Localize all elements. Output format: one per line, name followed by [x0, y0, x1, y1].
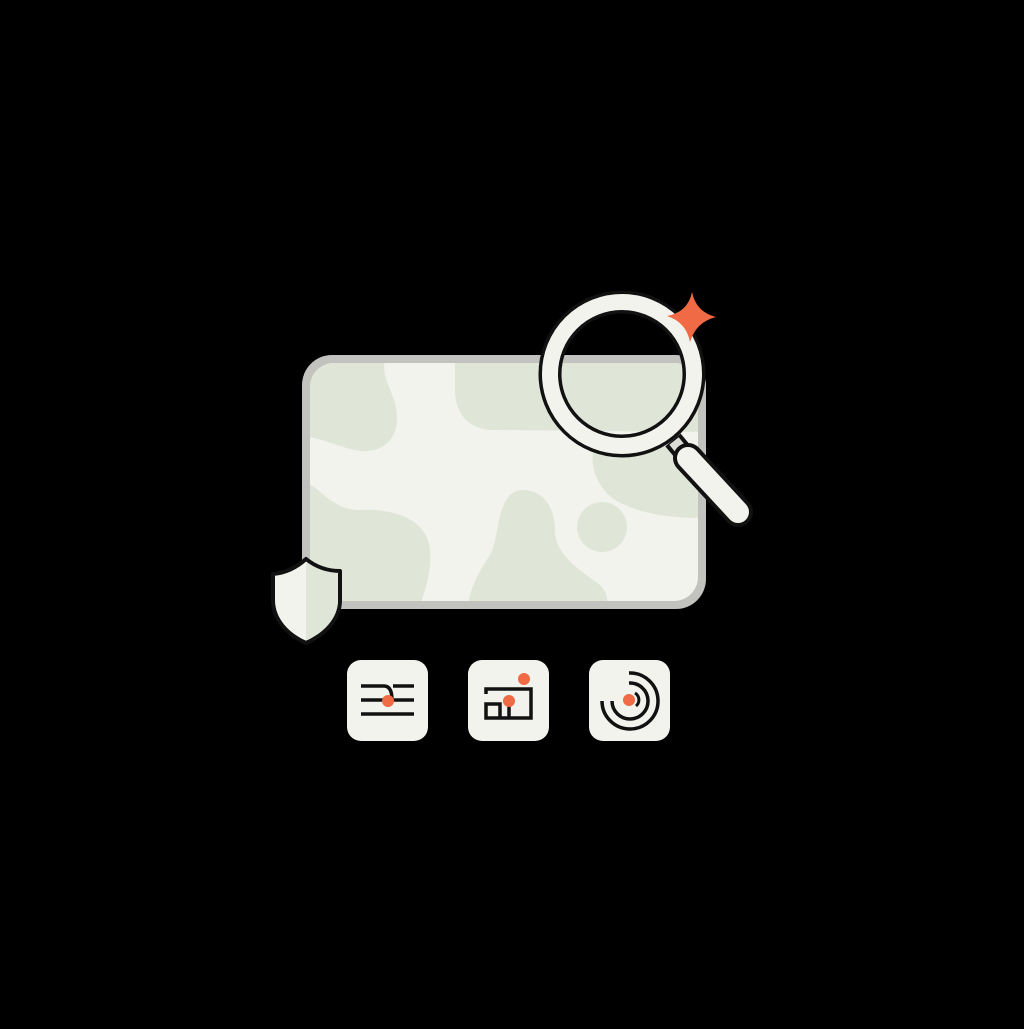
- panel: map card: [300, 355, 710, 610]
- icon: radar target: [589, 660, 670, 741]
- icon: magnifying glass: [550, 302, 738, 512]
- icon: filter list: [347, 660, 428, 741]
- icon: sparkle star: [667, 292, 716, 342]
- icon: bar chart: [468, 660, 549, 741]
- icon: shield: [273, 559, 340, 643]
